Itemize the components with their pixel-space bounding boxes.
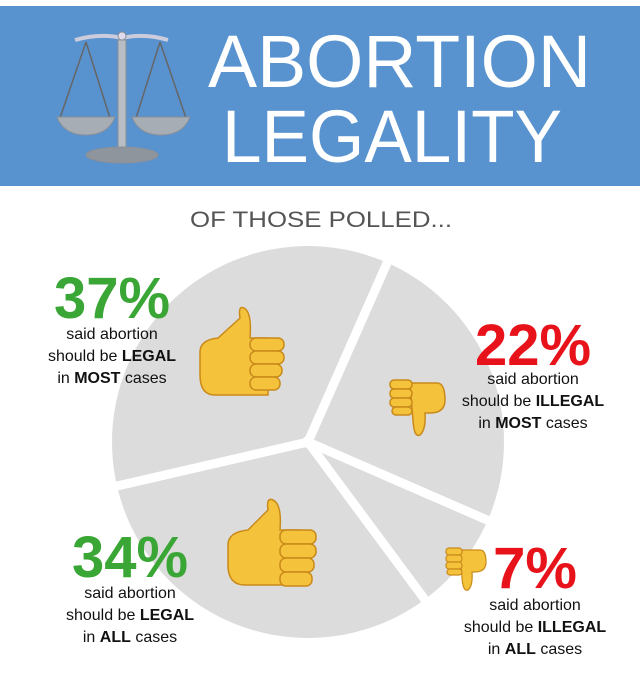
label: 37% legal most: said abortion [66, 326, 158, 343]
label: 34% legal all: in ALL cases [83, 629, 177, 646]
label: 22% illegal most: in MOST cases [478, 415, 588, 432]
label: 22% illegal most [462, 313, 604, 432]
label: 7% illegal all: 7% [493, 536, 577, 601]
label: 37% legal most [48, 266, 176, 387]
subtitle: OF THOSE POLLED... [190, 207, 452, 232]
label: 7% illegal all: should be ILLEGAL [464, 619, 606, 636]
label: 34% legal all [66, 525, 194, 646]
header banner [0, 6, 640, 186]
label: 34% legal all: said abortion [84, 585, 176, 602]
label: 22% illegal most: should be ILLEGAL [462, 393, 604, 410]
icon: thumbs down small [446, 548, 486, 590]
label: 34% legal all: should be LEGAL [66, 607, 194, 624]
icon: thumbs up top [200, 307, 284, 395]
icon: scales of justice [57, 32, 190, 163]
label: 7% illegal all: said abortion [489, 597, 581, 614]
label: 37% legal most: 37% [54, 266, 170, 331]
icon: thumbs down right [390, 380, 445, 435]
icon: thumbs up bottom [228, 499, 316, 586]
label: 7% illegal all [464, 536, 606, 658]
label: 22% illegal most: 22% [475, 313, 591, 378]
label: 34% legal all: 34% [72, 525, 188, 590]
header banner: LEGALITY [222, 95, 562, 178]
label: 37% legal most: should be LEGAL [48, 348, 176, 365]
label: 22% illegal most: said abortion [487, 371, 579, 388]
label: 7% illegal all: in ALL cases [488, 641, 582, 658]
title: ABORTION [208, 20, 591, 103]
pie chart [100, 245, 510, 638]
label: 37% legal most: in MOST cases [57, 370, 167, 387]
